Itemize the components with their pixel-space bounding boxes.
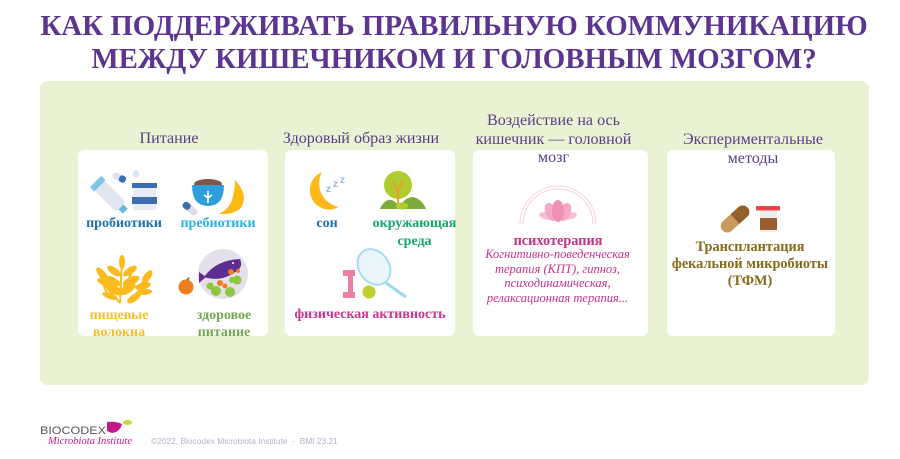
icon: moon and zzz: z — [340, 175, 345, 186]
label: environment: окружающая — [373, 216, 456, 231]
text: psychotherapy details: терапия (КПТ), гипноз, — [495, 262, 620, 276]
footer: copyright: ©2022, Biocodex Microbiota Institute - BMI 23.21 — [151, 436, 338, 446]
logo: Biocodex Microbiota Institute: Microbiota Institute — [47, 435, 132, 447]
heading: axis: мозг — [538, 149, 569, 166]
label: probiotics: пробиотики — [86, 216, 162, 231]
label: environment — [373, 216, 456, 248]
label: physical activity: физическая активность — [294, 307, 446, 322]
title: МЕЖДУ КИШЕЧНИКОМ И ГОЛОВНЫМ МОЗГОМ? — [91, 43, 817, 75]
label: dietary fibers — [90, 308, 148, 340]
label: fecal microbiota transplantation: фекальной микробиоты — [672, 256, 828, 272]
label: fecal microbiota transplantation: (ТФМ) — [728, 273, 772, 289]
heading: axis: Воздействие на ось — [487, 112, 620, 129]
label: psychotherapy: психотерапия — [514, 233, 602, 249]
icon: moon and zzz: z — [326, 184, 331, 195]
panel: nutrition card — [78, 150, 268, 336]
heading: axis — [476, 112, 631, 166]
heading: experimental: Экспериментальные — [683, 131, 823, 148]
panel: green background — [40, 81, 869, 385]
label: prebiotics: пребиотики — [180, 216, 256, 231]
label: sleep: сон — [316, 216, 338, 231]
text: psychotherapy details — [485, 247, 630, 305]
label: healthy eating: здоровое — [197, 308, 251, 323]
text: psychotherapy details: психодинамическая, — [504, 276, 611, 290]
text: psychotherapy details: релаксационная терапия... — [487, 291, 628, 305]
heading: experimental — [683, 131, 823, 166]
label: environment: среда — [397, 234, 432, 248]
title — [40, 10, 868, 75]
panel: experimental card — [667, 150, 835, 336]
heading: axis: кишечник — головной — [476, 130, 631, 148]
heading: experimental: методы — [728, 150, 778, 166]
label: fecal microbiota transplantation: Трансплантация — [696, 239, 804, 255]
label: fecal microbiota transplantation — [672, 239, 828, 289]
panel: lifestyle card — [285, 150, 455, 336]
label: dietary fibers: пищевые — [90, 308, 148, 323]
label: healthy eating — [196, 308, 251, 340]
text: psychotherapy details: Когнитивно-поведенческая — [485, 247, 630, 261]
label: healthy eating: питание — [198, 325, 250, 340]
heading: nutrition: Питание — [140, 130, 198, 147]
icon: moon and zzz: z — [333, 179, 338, 190]
title: КАК ПОДДЕРЖИВАТЬ ПРАВИЛЬНУЮ КОММУНИКАЦИЮ — [40, 10, 868, 42]
logo: Biocodex Microbiota Institute: BIOCODEX — [40, 425, 107, 437]
panel: axis card — [473, 150, 648, 336]
heading: lifestyle: Здоровый образ жизни — [283, 130, 439, 147]
label: dietary fibers: волокна — [93, 325, 145, 340]
